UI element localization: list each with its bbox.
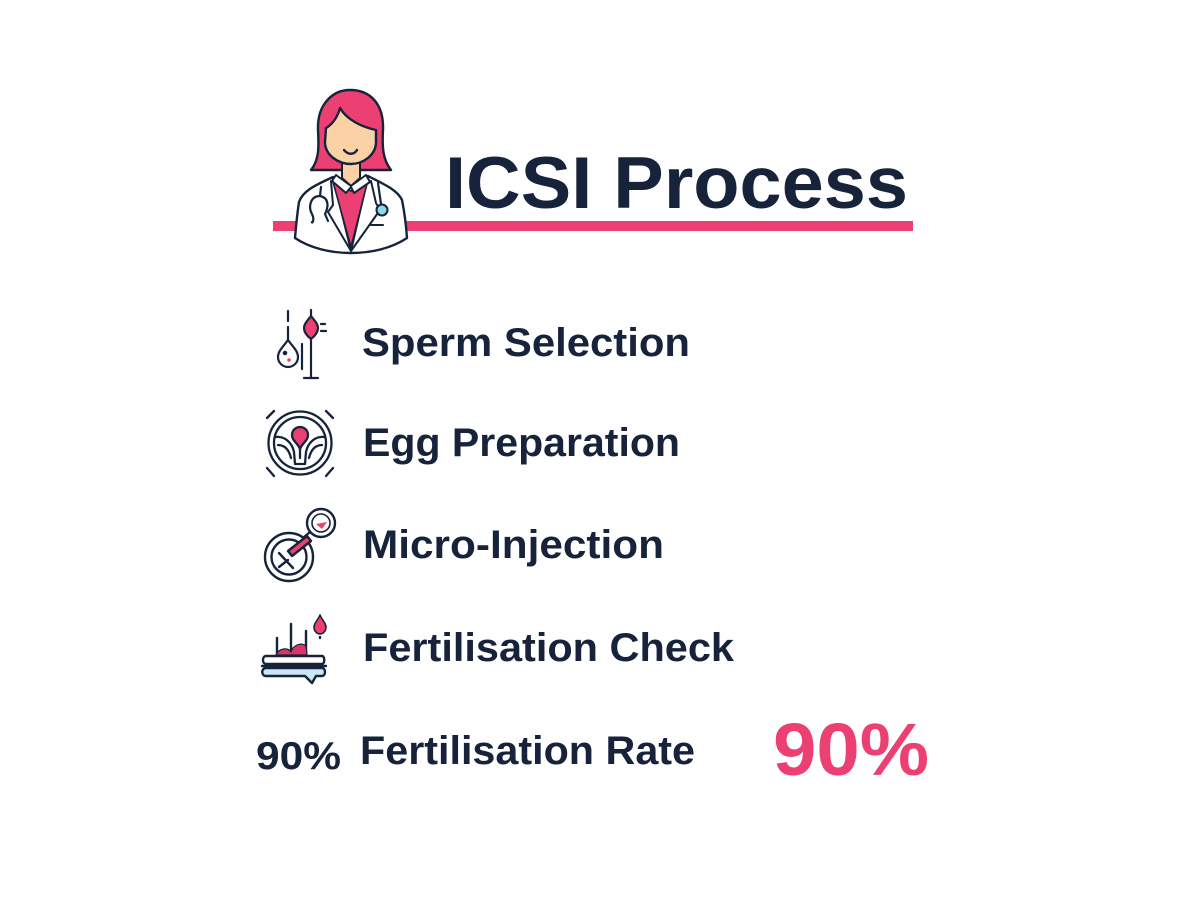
- step: micro-injection: [265, 509, 664, 581]
- icon: micro-injection: [265, 509, 335, 581]
- doctor hair: [311, 90, 391, 170]
- doctor collar: [332, 175, 370, 193]
- stat: fertilisation rate: [256, 708, 929, 791]
- doctor blouse: [333, 180, 368, 247]
- label: micro-injection: Micro-Injection: [363, 523, 664, 567]
- label: egg preparation: Egg Preparation: [363, 421, 680, 465]
- step: fertilisation check: [262, 615, 735, 683]
- large percentage: 90%: [773, 708, 929, 791]
- doctor neck: [342, 155, 360, 186]
- stethoscope chest piece: [376, 204, 388, 216]
- icon: fertilisation check: [262, 615, 326, 683]
- coat lapels: [328, 181, 380, 251]
- small percentage: 90%: [256, 735, 341, 778]
- label: fertilisation rate: Fertilisation Rate: [360, 729, 695, 773]
- doctor smile: [344, 150, 357, 154]
- title: ICSI Process: [445, 143, 908, 224]
- step: sperm selection: [278, 310, 690, 378]
- label: fertilisation check: Fertilisation Check: [363, 626, 735, 670]
- header underline: [273, 221, 913, 231]
- stethoscope: [310, 183, 381, 223]
- icon: doctor: [295, 90, 407, 253]
- doctor coat: [295, 176, 407, 253]
- label: sperm selection: Sperm Selection: [362, 321, 690, 365]
- doctor face: [325, 108, 376, 164]
- coat pocket: [371, 224, 383, 226]
- icon: sperm selection: [278, 310, 326, 378]
- icon: egg preparation: [267, 411, 333, 476]
- step: egg preparation: [267, 411, 680, 476]
